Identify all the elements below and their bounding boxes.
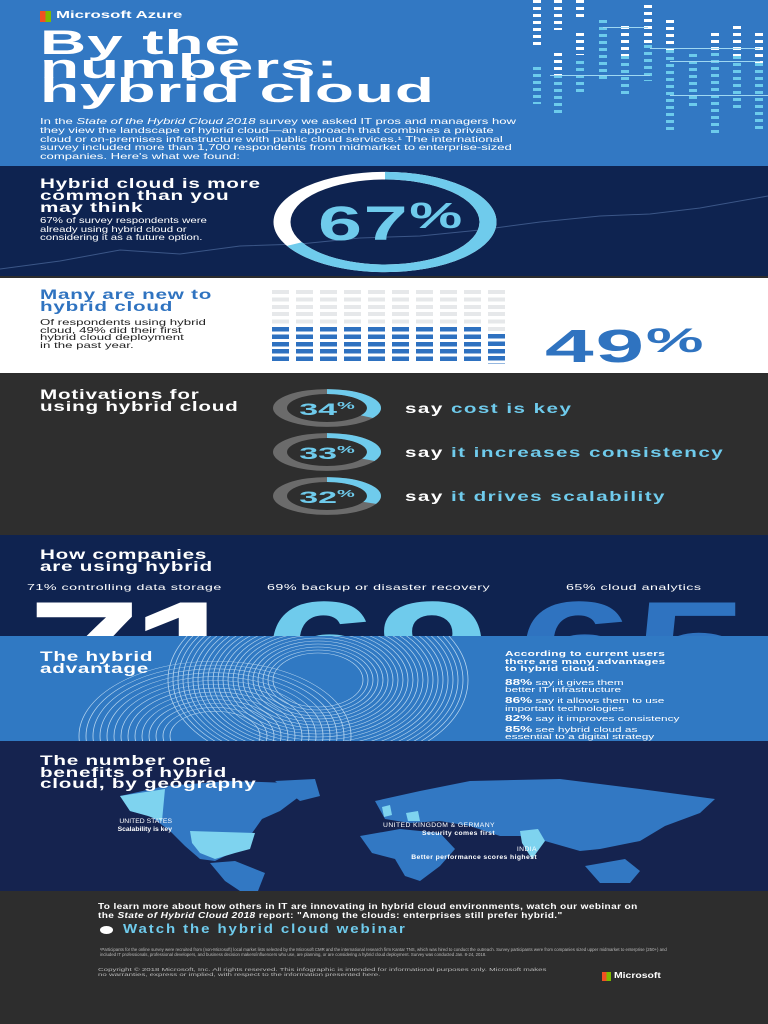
- panel: footer: [0, 891, 768, 1024]
- title: [40, 24, 435, 110]
- label: scalability: say it drives scalability: [405, 488, 666, 504]
- panel: geography: [0, 741, 768, 891]
- label: india: Better performance scores highest: [411, 854, 537, 861]
- title: By the: [40, 24, 241, 62]
- intro text: cloud or on-premises infrastructure with public cloud services.¹ The international: [40, 135, 503, 144]
- intro text: In the State of the Hybrid Cloud 2018 survey we asked IT pros and managers how: [40, 117, 516, 126]
- panel: how companies are using hybrid: [0, 535, 768, 636]
- heading: common than you: [40, 188, 229, 203]
- heading: Many are new to: [40, 287, 212, 302]
- heading: advantage: [40, 660, 149, 676]
- panel: hybrid advantage: [0, 636, 768, 741]
- panel: motivations: [0, 375, 768, 535]
- chart: 33%: %: [337, 445, 355, 456]
- decoration: concentric rings: [78, 636, 468, 741]
- heading: The number one: [40, 753, 211, 768]
- chart: 67% ring: [274, 172, 496, 272]
- text: [40, 216, 207, 242]
- heading: The hybrid: [40, 649, 153, 664]
- list: advantages: [505, 649, 680, 741]
- heading: [40, 176, 261, 215]
- list: advantages: According to current users: [505, 649, 665, 658]
- chart: 33%: [273, 433, 381, 471]
- heading: [40, 387, 239, 414]
- text: Of respondents using hybrid: [40, 318, 206, 327]
- label: india: [411, 846, 537, 861]
- text: 67% of survey respondents were: [40, 216, 207, 225]
- heading: [40, 287, 212, 314]
- stat: 49%: 49%: [545, 320, 705, 372]
- label: consistency: say it increases consistency: [405, 444, 724, 460]
- intro text: companies. Here's what we found:: [40, 152, 240, 161]
- heading: using hybrid cloud: [40, 398, 239, 414]
- intro text: [40, 117, 516, 161]
- map: world: [120, 779, 715, 891]
- chart: people grid: [272, 290, 505, 364]
- text: cloud, 49% did their first: [40, 326, 182, 335]
- heading: [40, 649, 153, 676]
- text: copyright: [98, 967, 546, 977]
- list: advantages: important technologies: [505, 704, 624, 713]
- heading: Motivations for: [40, 387, 200, 402]
- text: already using hybrid cloud or: [40, 225, 187, 234]
- heading: cloud, by geography: [40, 776, 257, 791]
- chart: 34%: %: [337, 401, 355, 412]
- text: copyright: no warranties, express or implied, with respect to the information presented here.: [98, 972, 380, 977]
- text: considering it as a future option.: [40, 233, 202, 242]
- text: copyright: Copyright © 2018 Microsoft, Inc. All rights reserved. This infographic is intended for informational purposes only. Microsoft makes: [98, 967, 546, 972]
- label: india: INDIA: [517, 846, 537, 853]
- label: uk & germany: [383, 822, 495, 837]
- panel: intro: [0, 0, 768, 166]
- link: watch webinar: Watch the hybrid cloud webinar: [123, 922, 407, 936]
- label: uk & germany: UNITED KINGDOM & GERMANY: [383, 822, 495, 829]
- chart: 67% ring: 67: [318, 197, 409, 250]
- list: advantages: 88% say it gives them: [505, 677, 624, 687]
- label: united states: [118, 818, 172, 833]
- label: 71%: 71% controlling data storage: [27, 582, 222, 592]
- chart: trend line: [0, 196, 768, 270]
- chart: 33%: 33: [299, 444, 337, 463]
- list: advantages: 85% see hybrid cloud as: [505, 724, 637, 734]
- label: united states: UNITED STATES: [119, 818, 172, 825]
- label: 65%: 65% cloud analytics: [566, 582, 702, 592]
- chart: 32%: [273, 477, 381, 515]
- chart: 34%: [273, 389, 381, 427]
- list: advantages: 86% say it allows them to use: [505, 695, 664, 705]
- label: 69%: 69% backup or disaster recovery: [267, 582, 490, 592]
- chart: 32%: %: [337, 489, 355, 500]
- list: advantages: there are many advantages: [505, 657, 666, 666]
- heading: benefits of hybrid: [40, 764, 227, 780]
- text: learn more: [98, 902, 638, 920]
- chart: 34%: 34: [299, 400, 337, 419]
- text: learn more: the State of Hybrid Cloud 2018 report: "Among the clouds: enterprises still prefer hybrid.": [98, 910, 563, 920]
- heading: How companies: [40, 547, 207, 562]
- decoration: data dot columns: [533, 0, 768, 133]
- panel: hybrid cloud is more common: [0, 166, 768, 276]
- text: learn more: To learn more about how others in IT are innovating in hybrid cloud environments, watch our webinar on: [98, 902, 638, 911]
- logo: Microsoft Azure: Microsoft Azure: [56, 9, 182, 21]
- heading: hybrid cloud: [40, 298, 173, 314]
- heading: [40, 753, 257, 791]
- chart: 32%: 32: [299, 488, 337, 507]
- intro text: they view the landscape of hybrid cloud—an approach that combines a private: [40, 126, 494, 135]
- list: advantages: better IT infrastructure: [505, 685, 621, 694]
- heading: [40, 547, 213, 574]
- list: advantages: 82% say it improves consistency: [505, 713, 679, 723]
- logo: Microsoft: Microsoft: [614, 971, 661, 980]
- text: footnote: ¹Participants for the online survey were recruited from (non-Microsoft) local market lists selected by the Microsoft CMR and the international research firm Kantar TNS, which was hired to conduct the outreach. Survey participants were from companies sized upper midmarket to enterprise (250+) and included IT professionals, professional developers, and business decision makers/influencers who use, are planning, or are considering a hybrid cloud deployment. Survey was conducted Jan. 8-24, 2018.: [100, 947, 667, 957]
- intro text: survey included more than 1,700 respondents from midmarket to enterprise-sized: [40, 143, 512, 152]
- label: cost: say cost is key: [405, 400, 572, 416]
- list: advantages: to hybrid cloud:: [505, 664, 599, 673]
- heading: are using hybrid: [40, 558, 213, 574]
- chart: 67% ring: %: [409, 196, 464, 236]
- text: hybrid cloud deployment: [40, 333, 184, 342]
- text: in the past year.: [40, 341, 134, 350]
- heading: Hybrid cloud is more: [40, 176, 261, 191]
- text: [40, 318, 206, 350]
- label: united states: Scalability is key: [118, 826, 172, 833]
- title: numbers:: [40, 48, 339, 86]
- label: uk & germany: Security comes first: [422, 830, 495, 837]
- heading: may think: [40, 200, 143, 215]
- panel: many are new: [0, 278, 768, 373]
- title: hybrid cloud: [40, 72, 435, 110]
